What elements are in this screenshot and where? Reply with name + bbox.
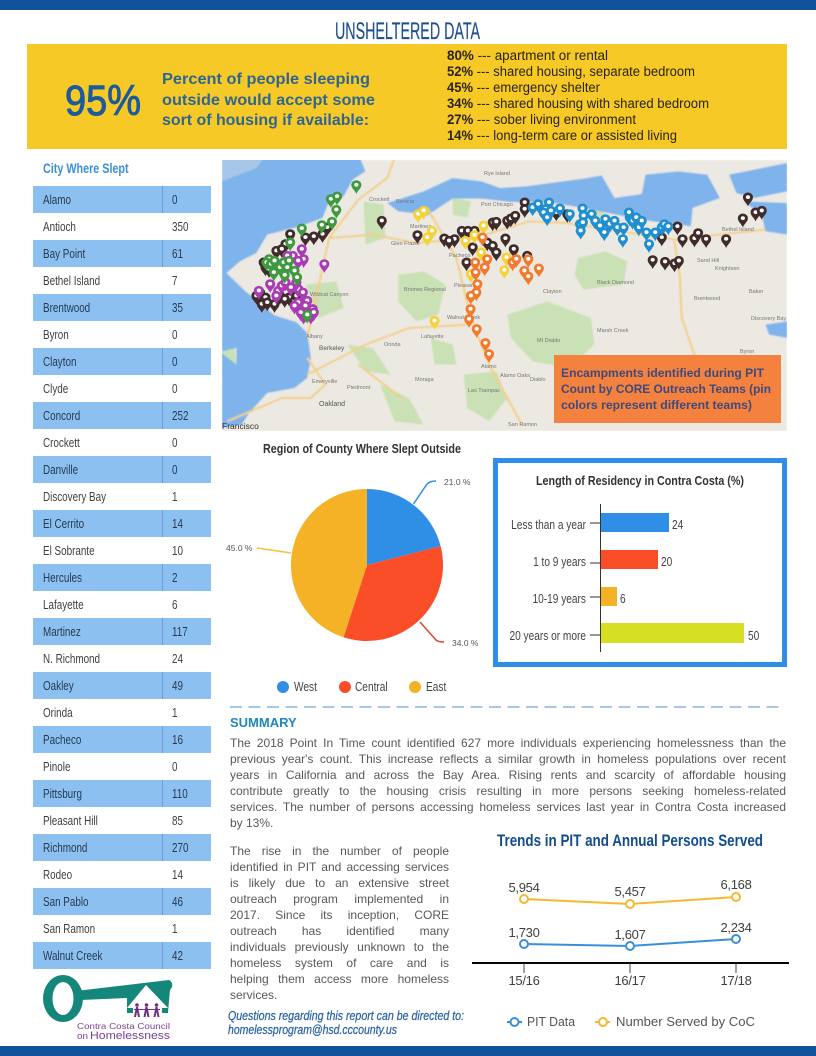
icon: house with people xyxy=(127,985,168,1018)
row: Alamo xyxy=(33,186,211,213)
row: Danville: Danville xyxy=(43,464,78,477)
map place labels: Martinez xyxy=(410,224,431,230)
row: San Ramon: San Ramon xyxy=(43,923,95,936)
map place labels: San Ramon xyxy=(508,422,537,428)
row: Clyde: Clyde xyxy=(43,383,68,396)
map place labels: Oakland xyxy=(319,401,345,408)
axis xyxy=(590,504,600,652)
bar: 20 years or more: 50 xyxy=(748,629,760,643)
map place labels: Lafayette xyxy=(421,334,444,340)
housing preference list xyxy=(447,48,709,143)
leader: West 21% xyxy=(414,477,471,504)
row: Brentwood: 35 xyxy=(172,302,183,315)
bar: 1 to 9 years xyxy=(533,550,673,569)
pie legend: West xyxy=(294,680,318,694)
row: Clyde xyxy=(43,383,177,396)
callout: encampments note: Count by CORE Outreach Teams (pin xyxy=(561,384,771,396)
row: Walnut Creek: Walnut Creek xyxy=(43,950,103,963)
row: Pinole: 0 xyxy=(172,761,177,774)
row: Pinole: Pinole xyxy=(43,761,70,774)
housing preference list: 52% --- shared housing, separate bedroom xyxy=(447,64,695,79)
banner description: outside would accept some xyxy=(162,92,375,109)
map place labels: Alamo xyxy=(481,364,497,370)
logo: Contra Costa Council on Homelessness: Homelessness xyxy=(90,1030,171,1042)
text block: summary paragraph 2: 2017. Since its inception, CORE xyxy=(230,908,449,922)
row: Pacheco xyxy=(33,726,211,753)
bar: Less than a year: 24 xyxy=(672,518,684,532)
map parks xyxy=(222,198,627,425)
row: Pleasant Hill: Pleasant Hill xyxy=(43,815,98,828)
pins: orange team xyxy=(464,233,544,363)
map place labels: Piedmont xyxy=(347,385,371,391)
map place labels: Clayton xyxy=(543,289,562,295)
row: Orinda: Orinda xyxy=(43,707,73,720)
pins: purple team xyxy=(254,244,329,325)
row: Discovery Bay: 1 xyxy=(172,491,177,504)
map place labels: Crockett xyxy=(369,197,390,203)
line: number served by CoC xyxy=(508,877,752,908)
panel: trends line chart: 17/18 xyxy=(720,973,752,988)
map place labels: Las Trampas xyxy=(468,388,500,394)
text block: summary paragraph 1: previous year's count. This increase reflects a similar growth in homeless populations over recent xyxy=(230,752,786,766)
row: San Ramon: 1 xyxy=(172,923,177,936)
x axis xyxy=(472,962,789,964)
map place labels: Francisco xyxy=(222,421,259,431)
row: Martinez xyxy=(33,618,211,645)
row: El Sobrante xyxy=(43,545,183,558)
line: PIT data: 2,234 xyxy=(720,920,752,935)
row: Byron: Byron xyxy=(43,329,69,342)
row: El Sobrante: El Sobrante xyxy=(43,545,95,558)
row: Antioch: Antioch xyxy=(43,221,76,234)
top bar xyxy=(0,0,816,10)
bar: Less than a year: Less than a year xyxy=(511,518,586,532)
row: Richmond: 270 xyxy=(172,842,188,855)
panel: housing acceptance banner xyxy=(27,44,787,149)
row: Lafayette xyxy=(43,599,177,612)
row: Oakley: Oakley xyxy=(43,680,74,693)
row: Clyde: 0 xyxy=(172,383,177,396)
banner description: Percent of people sleeping xyxy=(162,71,370,88)
row: Bay Point: Bay Point xyxy=(43,248,86,261)
row: Concord: 252 xyxy=(172,410,188,423)
panel: encampment map xyxy=(222,158,787,431)
row: El Cerrito: 14 xyxy=(172,518,183,531)
row: Pittsburg: Pittsburg xyxy=(43,788,82,801)
text block: summary paragraph 2 xyxy=(230,844,449,1002)
map place labels: Alamo Oaks xyxy=(500,373,530,379)
text block: summary paragraph 2: is likely due to an extensive street xyxy=(230,876,449,890)
text block: summary paragraph 2: identified in PIT and accessing services xyxy=(230,860,449,874)
row: El Cerrito xyxy=(33,510,211,537)
map place labels: Port Chicago xyxy=(481,202,513,208)
map place labels: Sand Hill xyxy=(697,258,719,264)
text block: summary paragraph 2: The rise in the number of people xyxy=(230,844,449,858)
row: Walnut Creek: 42 xyxy=(172,950,183,963)
row: Richmond: Richmond xyxy=(43,842,87,855)
row: Orinda xyxy=(43,707,177,720)
text block: summary paragraph 2: individuals previously unknown to the xyxy=(230,940,449,954)
leader: Central 34%: 34.0 % xyxy=(452,638,479,648)
row: Pinole xyxy=(43,761,177,774)
bar: 10-19 years: 6 xyxy=(620,592,626,606)
logo: Contra Costa Council on Homelessness xyxy=(43,975,172,1042)
map base xyxy=(222,158,787,431)
contact note xyxy=(228,1008,464,1037)
summary heading: SUMMARY xyxy=(230,715,297,730)
row: Hercules: 2 xyxy=(172,572,177,585)
row: Pacheco: 16 xyxy=(172,734,183,747)
housing preference list: 45% --- emergency shelter xyxy=(447,80,600,95)
panel: region pie chart xyxy=(226,442,479,694)
row: Pittsburg xyxy=(33,780,211,807)
line chart legend: Number Served by CoC xyxy=(616,1015,755,1029)
pie legend: Central xyxy=(355,680,388,694)
bar: 20 years or more xyxy=(509,623,760,643)
row: Lafayette: Lafayette xyxy=(43,599,84,612)
map place labels: Black Diamond xyxy=(597,280,634,286)
bar: 10-19 years xyxy=(533,587,626,606)
text block: summary paragraph 1: contribute greatly to the housing crisis resulting in more persons seeking homeless-related xyxy=(230,784,786,798)
row: Hercules: Hercules xyxy=(43,572,82,585)
map place labels: Walnut Creek xyxy=(447,315,480,321)
housing preference list: 80% --- apartment or rental xyxy=(447,48,608,63)
line: number served by CoC: 6,168 xyxy=(720,877,752,892)
row: San Pablo: 46 xyxy=(172,896,183,909)
map place labels: Baker xyxy=(749,289,764,295)
map water xyxy=(222,158,787,428)
map place labels: Wildcat Canyon xyxy=(310,292,349,298)
row: El Cerrito: El Cerrito xyxy=(43,518,84,531)
leader: East 45%: 45.0 % xyxy=(226,543,253,553)
line chart legend: PIT Data xyxy=(527,1015,575,1029)
row: Discovery Bay xyxy=(43,491,177,504)
map pins xyxy=(251,180,767,363)
housing preference list: 34% --- shared housing with shared bedroom xyxy=(447,96,709,111)
pins: green team xyxy=(262,180,361,324)
table heading: City Where Slept xyxy=(43,161,129,176)
text block: summary paragraph 1: services. The number of persons accessing homeless services last year in Contra Costa increased xyxy=(230,800,786,814)
bar: 20 years or more: 20 years or more xyxy=(509,629,586,643)
text block: summary paragraph 2: outreach program implemented in xyxy=(230,892,449,906)
row: Antioch: 350 xyxy=(172,221,188,234)
bar: 1 to 9 years: 1 to 9 years xyxy=(533,555,586,569)
row: Byron: 0 xyxy=(172,329,177,342)
bar: 10-19 years: 10-19 years xyxy=(533,592,586,606)
row: Concord xyxy=(33,402,211,429)
row: Pleasant Hill xyxy=(43,815,183,828)
row: Walnut Creek xyxy=(33,942,211,969)
pie chart xyxy=(291,489,443,641)
map place labels: Brentwood xyxy=(694,296,720,302)
row: Oakley: 49 xyxy=(172,680,183,693)
pins: yellow team xyxy=(413,206,512,330)
line: PIT data: 1,730 xyxy=(508,925,540,940)
text block: summary paragraph 1: years in California and across the Bay Area. Rising rents and scarcity of affordable housing xyxy=(230,768,786,782)
row: Pittsburg: 110 xyxy=(172,788,188,801)
row: Discovery Bay: Discovery Bay xyxy=(43,491,106,504)
row: Bethel Island: Bethel Island xyxy=(43,275,100,288)
big stat: 95%: 95% xyxy=(65,77,141,125)
pie legend: East xyxy=(426,680,447,694)
map roads xyxy=(227,158,765,425)
map place labels: Discovery Bay xyxy=(751,316,786,322)
map place labels: Pacheco xyxy=(449,253,470,259)
row: Crockett: Crockett xyxy=(43,437,80,450)
row: Bay Point xyxy=(33,240,211,267)
pins: dark team xyxy=(251,193,767,313)
map place labels: Marsh Creek xyxy=(597,328,629,334)
panel: length of residency bar chart xyxy=(496,460,784,664)
row: Clayton xyxy=(33,348,211,375)
leader: West 21%: 21.0 % xyxy=(444,477,471,487)
housing preference list: 27% --- sober living environment xyxy=(447,112,636,127)
row: Orinda: 1 xyxy=(172,707,177,720)
row: Rodeo xyxy=(43,869,183,882)
row: San Pablo: San Pablo xyxy=(43,896,89,909)
row: Pacheco: Pacheco xyxy=(43,734,81,747)
contact note: Questions regarding this report can be directed to: xyxy=(228,1008,464,1023)
row: Danville xyxy=(33,456,211,483)
line chart legend xyxy=(507,1015,755,1029)
row: Hercules xyxy=(33,564,211,591)
bar chart title: Length of Residency in Contra Costa (%) xyxy=(536,474,744,488)
leader: Central 34% xyxy=(420,622,479,648)
line: number served by CoC: 5,954 xyxy=(508,880,540,895)
row: Richmond xyxy=(33,834,211,861)
callout: encampments note: Encampments identified during PIT xyxy=(561,368,764,380)
row: San Ramon xyxy=(43,923,177,936)
bottom bar xyxy=(0,1046,816,1056)
housing preference list: 14% --- long-term care or assisted living xyxy=(447,128,677,143)
row: Alamo: 0 xyxy=(172,194,177,207)
row: Byron xyxy=(43,329,177,342)
row: Rodeo: Rodeo xyxy=(43,869,72,882)
line: number served by CoC: 5,457 xyxy=(614,884,646,899)
row: Clayton: Clayton xyxy=(43,356,76,369)
bar: Less than a year xyxy=(511,513,684,532)
panel: trends line chart: 15/16 xyxy=(508,973,540,988)
line: PIT data: 1,607 xyxy=(614,927,646,942)
text block: summary paragraph 1: by 13%. xyxy=(230,816,273,830)
row: Crockett xyxy=(43,437,177,450)
title: UNSHELTERED DATA xyxy=(335,18,480,45)
map place labels: Briones Regional xyxy=(404,287,446,293)
map place labels: Bethel Island xyxy=(722,227,754,233)
callout: encampments note xyxy=(554,355,781,423)
pie chart title: Region of County Where Slept Outside xyxy=(263,442,461,456)
callout: encampments note: colors represent different teams) xyxy=(561,400,752,412)
text block: summary paragraph 2: homeless system of care and is xyxy=(230,956,449,970)
text block: summary paragraph 1 xyxy=(230,736,786,830)
row: Bethel Island xyxy=(43,275,177,288)
line: PIT data xyxy=(508,920,752,950)
row: Bay Point: 61 xyxy=(172,248,183,261)
row: Clayton: 0 xyxy=(172,356,177,369)
row: Danville: 0 xyxy=(172,464,177,477)
map place labels: Benicia xyxy=(396,199,415,205)
row: Pleasant Hill: 85 xyxy=(172,815,183,828)
dashed divider xyxy=(230,706,781,708)
map place labels: Mt Diablo xyxy=(537,338,560,344)
panel: trends line chart xyxy=(472,831,789,1029)
banner description: sort of housing if available: xyxy=(162,112,369,129)
map place labels: Moraga xyxy=(415,377,435,383)
map place labels: Berkeley xyxy=(319,345,345,352)
text block: summary paragraph 2: helping them access more homeless xyxy=(230,972,449,986)
row: N. Richmond: N. Richmond xyxy=(43,653,100,666)
row: Lafayette: 6 xyxy=(172,599,177,612)
row: N. Richmond xyxy=(43,653,183,666)
panel: city table xyxy=(33,161,211,969)
map place labels: Orinda xyxy=(384,342,401,348)
map place labels: Albany xyxy=(306,334,323,340)
row: Bethel Island: 7 xyxy=(172,275,177,288)
text block: summary paragraph 2: outreach has identified many xyxy=(230,924,449,938)
map place labels: Diablo xyxy=(530,377,546,383)
row: N. Richmond: 24 xyxy=(172,653,183,666)
leader: East 45% xyxy=(226,543,291,553)
text block: summary paragraph 2: services. xyxy=(230,988,277,1002)
map place labels: Knightsen xyxy=(715,266,739,272)
contact note: homelessprogram@hsd.cccounty.us xyxy=(228,1022,397,1037)
banner description xyxy=(162,71,375,129)
bar: 1 to 9 years: 20 xyxy=(661,555,673,569)
map place labels: Pleasant xyxy=(454,283,476,289)
logo: Contra Costa Council on Homelessness: on xyxy=(77,1031,88,1041)
map place labels xyxy=(222,171,786,431)
row: Alamo: Alamo xyxy=(43,194,71,207)
pie legend xyxy=(277,680,447,694)
row: San Pablo xyxy=(33,888,211,915)
row: Brentwood: Brentwood xyxy=(43,302,90,315)
panel: trends line chart: 16/17 xyxy=(614,973,646,988)
logo wordmark: Contra Costa Council xyxy=(77,1021,170,1031)
map place labels: Rye Island xyxy=(484,171,510,177)
map place labels: Byron xyxy=(740,349,754,355)
map place labels: Glen Frazer xyxy=(391,241,420,247)
row: Crockett: 0 xyxy=(172,437,177,450)
row: Antioch xyxy=(43,221,188,234)
text block: summary paragraph 1: The 2018 Point In Time count identified 627 more individuals experiencing homelessness than the xyxy=(230,736,786,750)
icon: key xyxy=(43,975,172,1022)
row: Brentwood xyxy=(33,294,211,321)
row: Oakley xyxy=(33,672,211,699)
row: El Sobrante: 10 xyxy=(172,545,183,558)
map place labels: Emeryville xyxy=(312,379,337,385)
row: Rodeo: 14 xyxy=(172,869,183,882)
row: Concord: Concord xyxy=(43,410,80,423)
row: Martinez: Martinez xyxy=(43,626,81,639)
pins: blue team xyxy=(528,198,673,253)
row: Martinez: 117 xyxy=(172,626,188,639)
